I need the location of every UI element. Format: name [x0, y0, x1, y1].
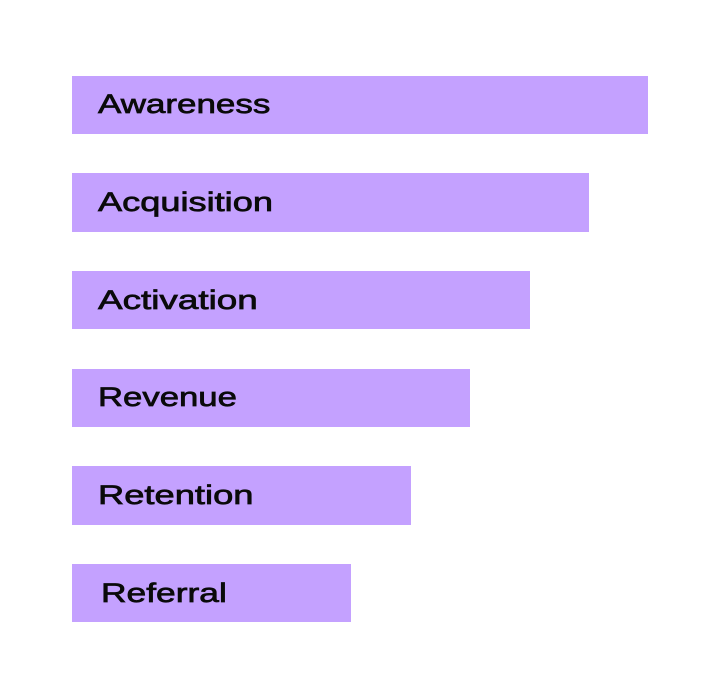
bar: Awareness	[72, 76, 648, 134]
bar: Retention	[72, 466, 411, 525]
bar: Retention: Retention	[98, 480, 254, 510]
bar: Revenue: Revenue	[98, 382, 237, 412]
bar: Acquisition: Acquisition	[98, 187, 273, 217]
bar: Referral: Referral	[101, 578, 227, 608]
bar: Activation	[72, 271, 530, 329]
bar: Acquisition	[72, 173, 589, 232]
bar: Activation: Activation	[98, 285, 258, 315]
bar: Awareness: Awareness	[98, 89, 271, 119]
bar: Revenue	[72, 369, 470, 427]
bar: Referral	[72, 564, 351, 622]
